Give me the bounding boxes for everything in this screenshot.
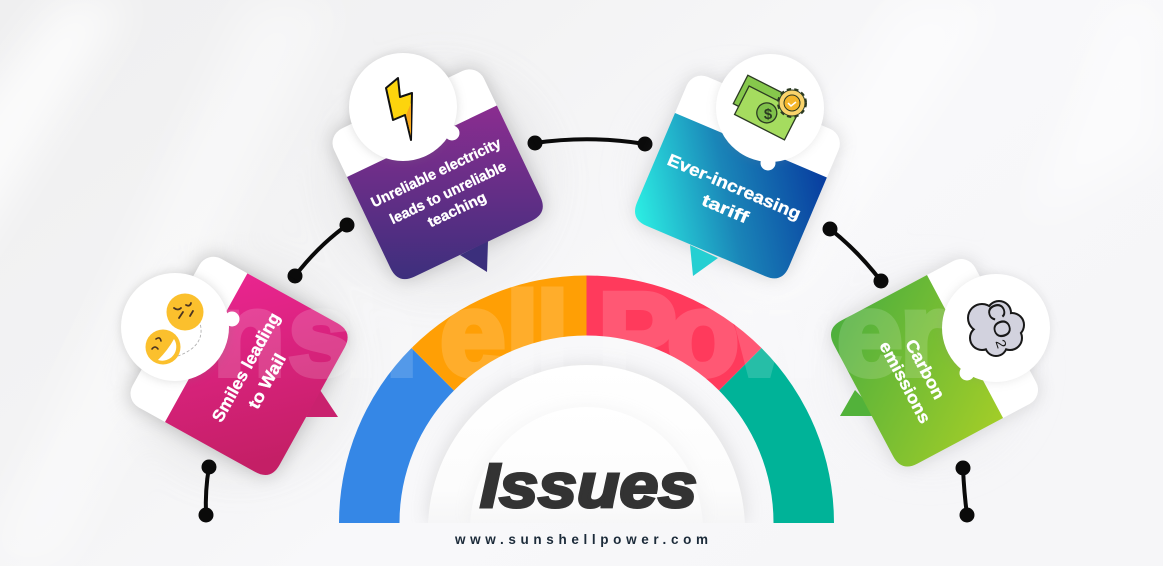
label: Smiles leading: [208, 309, 284, 425]
connector: lower right: [956, 460, 974, 522]
connector: top: [528, 136, 652, 152]
label: Carbon: [901, 336, 949, 403]
card: ever-increasing tariff: [630, 71, 845, 283]
icon: money and gear: $: [764, 106, 773, 123]
label: Ever-increasing: [665, 150, 804, 224]
card: carbon emissions: [825, 253, 1044, 472]
card: unreliable electricity: [327, 64, 548, 284]
title: Issues: [480, 452, 697, 521]
card tail pink: [306, 390, 338, 417]
connector: left: [288, 218, 354, 284]
label: teaching: [425, 190, 489, 231]
icon: smiling and wailing faces: [121, 273, 240, 381]
label: emissions: [875, 338, 934, 427]
card: smiles leading to wail: [125, 251, 353, 481]
label: tariff: [699, 191, 752, 227]
connector: right: [822, 222, 888, 288]
icon: CO2 cloud: [942, 274, 1050, 382]
website url: www.sunshellpower.com: [454, 532, 708, 547]
label: Unreliable electricity: [369, 136, 504, 211]
label: leads to unreliable: [388, 159, 509, 228]
watermark: nshellPower: [213, 269, 946, 401]
connector: lower left: [198, 460, 216, 522]
label: to Wail: [244, 350, 290, 412]
icon: CO2 cloud: CO₂: [980, 300, 1020, 351]
icon: lightning bolt: [349, 53, 460, 161]
icon: money and gear: [716, 54, 824, 170]
card tail teal: [690, 245, 718, 276]
inner concentric discs: [428, 364, 745, 530]
card tail purple: [460, 241, 488, 272]
semicircle: coloured arc segments: [339, 276, 834, 523]
label: [875, 336, 949, 427]
card tail green: [840, 390, 880, 416]
